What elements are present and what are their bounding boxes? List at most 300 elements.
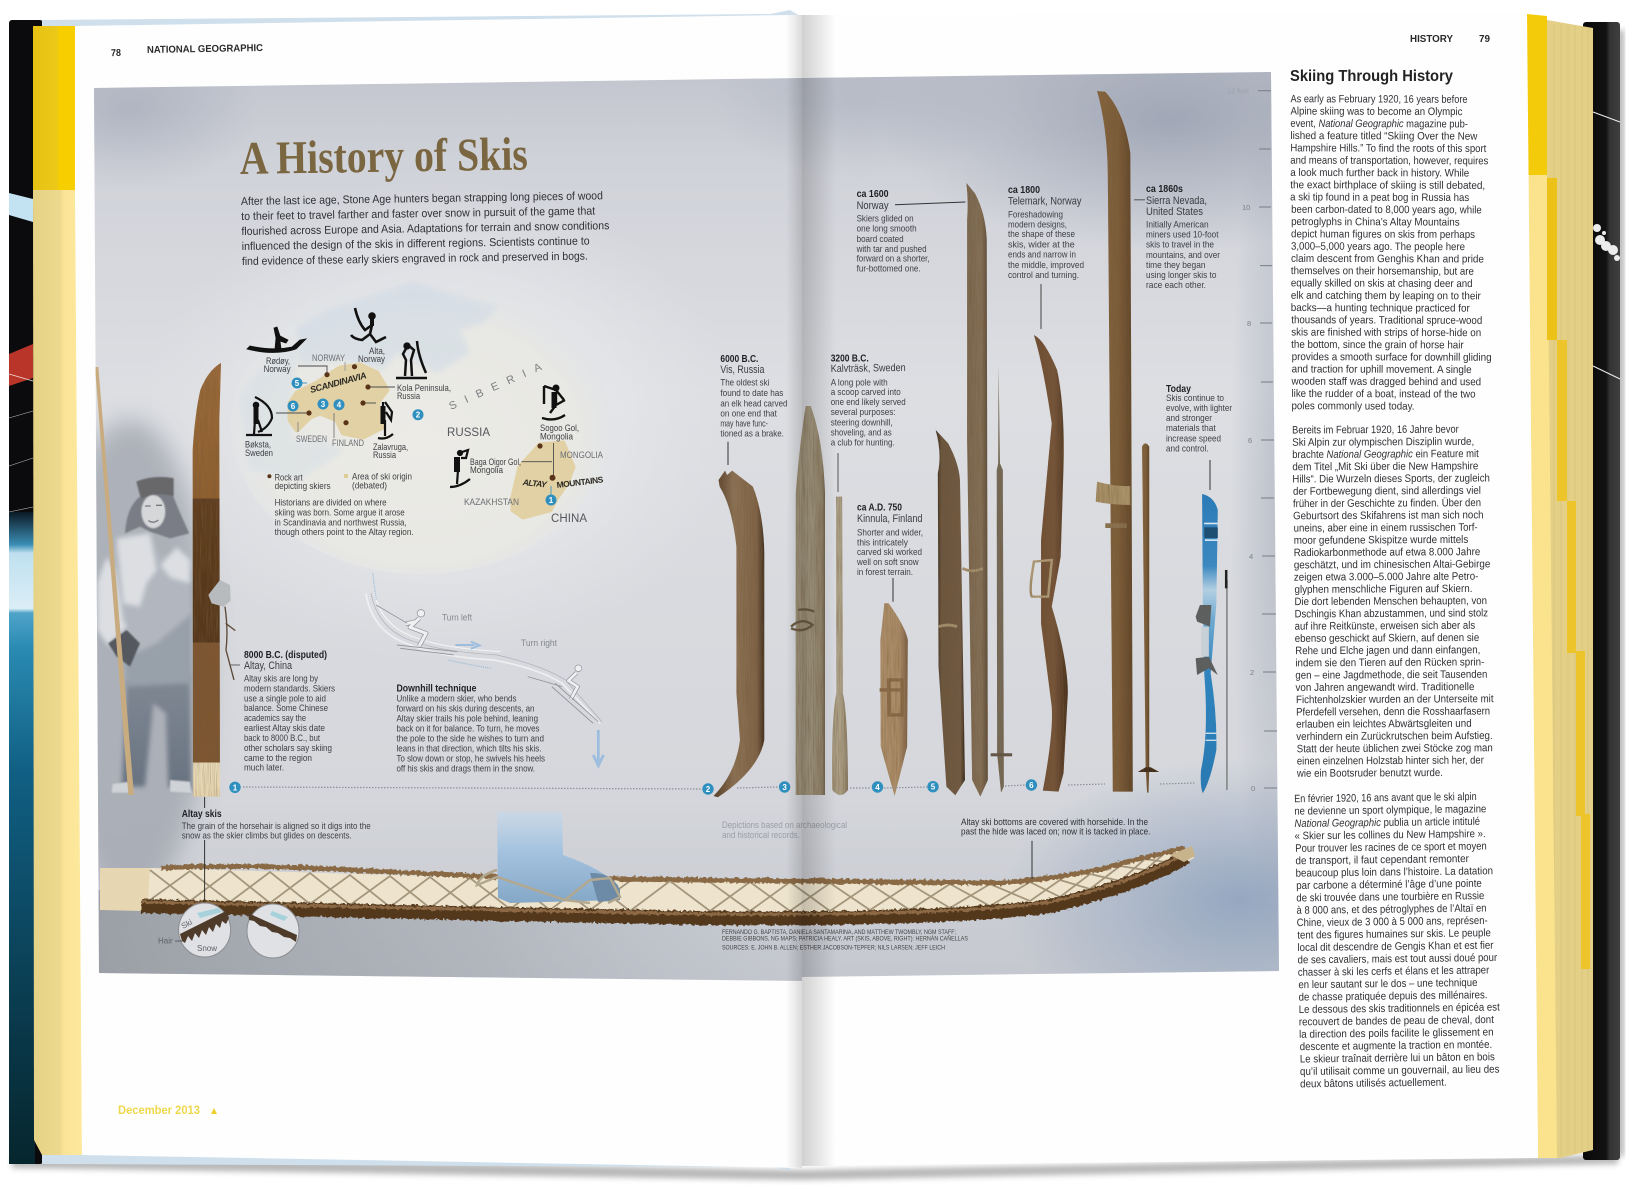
text block: ca 1800: modern designs, xyxy=(1008,218,1067,229)
sidebar text: German: der Fortbewegung dient, sind allerdings viel xyxy=(1293,485,1481,498)
text block: ca 1600: Norway xyxy=(857,200,889,212)
note: depictions: and historical records. xyxy=(722,830,800,840)
sidebar text: English: skis are finished with strips of horse-hide on xyxy=(1291,327,1481,339)
text block: 6000 B.C. xyxy=(720,354,787,465)
sidebar text: French: beaucoup plus loin dans l’histoire. La datation xyxy=(1295,865,1493,880)
sidebar text: German: Hills“. Die Wurzeln dieses Sports, der zugleich xyxy=(1292,472,1490,486)
map labels: SCANDINAVIA xyxy=(309,370,368,395)
text block: 8000 B.C.: Altay, China xyxy=(244,660,292,672)
text block: 3200 B.C.: shoveling, and as xyxy=(831,426,892,438)
ski 3200 B.C. xyxy=(796,406,825,795)
page header right xyxy=(1410,34,1490,45)
hood fur xyxy=(125,477,189,538)
text block: ca 1800: the shape of these xyxy=(1008,228,1075,239)
lattice lacing xyxy=(150,853,1165,911)
callout: Altay skis xyxy=(182,797,371,900)
ski ca A.D. 750 xyxy=(880,603,908,796)
map labels: Kola Peninsula, xyxy=(397,383,451,393)
sidebar text: German: indem sie den Tieren auf den Rücken sprin- xyxy=(1295,656,1485,669)
text block: downhill technique: the pole to the side he wishes to turn and xyxy=(396,732,544,743)
right page edge stack xyxy=(1527,14,1593,1158)
text block: 8000 B.C.: 8000 B.C. (disputed) xyxy=(244,650,327,661)
ski ca 1600 xyxy=(966,183,988,797)
left page xyxy=(75,15,802,1168)
map legend: depicting skiers xyxy=(275,481,331,491)
diagram labels: turns xyxy=(442,612,557,648)
panel: illustration background xyxy=(94,72,1279,981)
globe disc xyxy=(231,278,611,574)
heading: sidebar: Skiing Through History xyxy=(1290,68,1453,85)
ski ca 1860s xyxy=(1097,91,1133,792)
right page xyxy=(802,14,1538,1166)
map labels: Mongolia xyxy=(540,432,573,442)
pole basket xyxy=(991,753,1012,756)
text block: ca 1600 xyxy=(856,189,965,274)
sidebar text: French: Chine, vieux de 3 000 à 5 000 ans, représen- xyxy=(1297,915,1488,929)
sidebar text: German: erlauben ein leichtes Abwärtsgleiten und xyxy=(1296,718,1472,731)
text block: 6000 B.C.: The oldest ski xyxy=(720,377,769,388)
map note: Historians are divided on where xyxy=(275,498,387,508)
numbered ski markers xyxy=(229,779,1037,795)
map labels: Sogoo Gol, xyxy=(540,423,579,433)
text block: 8000 B.C.: other scholars say skiing xyxy=(244,742,332,753)
text block: ca 1860s: ca 1860s xyxy=(1146,184,1183,195)
height scale in feet: 8 xyxy=(1247,319,1251,328)
map labels: Baga Oigor Gol, xyxy=(470,457,521,467)
sidebar text: French: deux bâtons utilisés actuellement. xyxy=(1300,1077,1447,1090)
map labels: Sweden xyxy=(245,448,273,458)
text block: ca 1800: Telemark, Norway xyxy=(1008,196,1082,208)
sidebar text: French: Le dessous des skis traditionnels en épicéa est xyxy=(1299,1002,1500,1016)
map labels: SWEDEN xyxy=(296,434,327,444)
skier turning left xyxy=(376,605,457,655)
sidebar text: German: früher in der Geschichte zu finden. Über den xyxy=(1293,497,1481,510)
map labels: SIBERIA xyxy=(447,361,544,413)
numbered map markers: 5 xyxy=(295,379,300,388)
credits: FERNANDO G. BAPTISTA, DANIELA SANTAMARINA, AND MATTHEW TWOMBLY, NGM STAFF; xyxy=(722,930,956,936)
text block: ca 1860s xyxy=(1134,184,1220,290)
sidebar text: German: von Jahren angewandt wird. Traditionelle xyxy=(1295,681,1474,694)
text block: 8000 B.C.: academics say the xyxy=(244,712,306,723)
illustration: Altay skier xyxy=(95,363,235,797)
text block: ca 1600: board coated xyxy=(857,233,904,244)
diagram labels: turns: Turn left xyxy=(442,612,472,622)
sidebar text: English: 3,000–5,000 years ago. The people here xyxy=(1291,241,1465,253)
sidebar text: English: equally skilled on skis at chasing deer and xyxy=(1291,277,1473,290)
numbered ski markers: 3 xyxy=(782,783,787,792)
sidebar text: English: elk and catching them by leaping on to their xyxy=(1291,290,1481,302)
modern pole xyxy=(1226,580,1228,790)
coat fur patches xyxy=(97,533,190,645)
intro text: influenced the design of the skis in different regions. Scientists continue to xyxy=(242,236,590,253)
pole basket xyxy=(1138,767,1159,772)
text block: downhill technique: Altay skier trails his pole behind, leaning xyxy=(396,712,538,723)
small strap xyxy=(1105,523,1127,528)
hairy ski xyxy=(936,430,965,795)
text block: ca 1600: ca 1600 xyxy=(857,189,889,200)
text block: ca A.D. 750: ca A.D. 750 xyxy=(857,502,902,514)
height scale in feet: 0 xyxy=(1251,784,1255,793)
text block: 3200 B.C.: A long pole with xyxy=(831,376,888,388)
sidebar text: French: en leur sautant sur le dos – une technique xyxy=(1298,977,1477,991)
cover board bottom edge xyxy=(42,1150,790,1170)
sidebar text: German: Geburtsort des Skifahrens ist man sich noch xyxy=(1293,509,1484,522)
sidebar text: German: glyphen menschliche Figuren auf Skiern. xyxy=(1294,583,1472,596)
text block: 3200 B.C.: several purposes: xyxy=(831,406,896,417)
map legend xyxy=(267,472,412,491)
intro text: to their feet to travel farther and faster over snow in pursuit of the game that xyxy=(241,205,596,223)
scoop pole xyxy=(832,497,848,795)
text block: 8000 B.C.: back to 8000 B.C., but xyxy=(244,732,320,743)
text block: today: evolve, with lighter xyxy=(1166,402,1232,413)
man's lower coat xyxy=(124,586,192,688)
map note: though others point to the Altay region. xyxy=(275,527,414,537)
sidebar text: English: the bottom, since the grain of horse hair xyxy=(1291,339,1464,351)
sidebar text: German: Dschingis Khan abzustammen, und sind stolz xyxy=(1295,607,1488,620)
map leader lines xyxy=(276,362,554,496)
sidebar text: German: brachte National Geographic ein Feature mit xyxy=(1292,448,1479,461)
text block: 6000 B.C.: tioned as a brake. xyxy=(720,428,784,439)
text block: ca 1860s: race each other. xyxy=(1146,279,1206,290)
origin area: Altay xyxy=(513,443,573,517)
sidebar text: English: backs—a hunting technique practiced for xyxy=(1291,302,1470,315)
magnifier: hair grips snow xyxy=(158,903,231,957)
map note: in Scandinavia and northwest Russia, xyxy=(275,518,407,528)
ski loop strap xyxy=(1031,560,1052,597)
numbered map markers: 4 xyxy=(337,401,342,410)
skier turning right xyxy=(528,665,598,723)
sidebar text: German: wie ein Bootsruder benutzt wurde. xyxy=(1296,767,1443,780)
magnifier: hair glides on snow xyxy=(247,904,299,958)
text block: ca 1860s: Initially American xyxy=(1146,219,1209,230)
text block: 3200 B.C.: steering downhill, xyxy=(831,416,893,428)
icon: petroglyph Alta xyxy=(351,308,386,342)
sidebar text: English: depict human figures on skis from perhaps xyxy=(1291,228,1476,241)
text block: ca 1860s: time they began xyxy=(1146,259,1206,270)
text block: ca 1600: Skiers glided on xyxy=(857,212,914,224)
thin pole xyxy=(997,367,1004,793)
sidebar text: French: recouvert de bandes de peau de cheval, dont xyxy=(1299,1014,1494,1028)
sidebar text: English: provides a smooth surface for downhill gliding xyxy=(1292,351,1492,364)
sidebar text: German: einen einzelnen Holzstab hinter sich her, der xyxy=(1297,755,1484,767)
sidebar text: French: local dit descendre de Gengis Khan et est fier xyxy=(1297,940,1494,954)
intro text: After the last ice age, Stone Age hunters began strapping long pieces of wood xyxy=(241,190,603,208)
1860s pole xyxy=(1142,443,1149,793)
sidebar text: French: chasser à ski les cerfs et élans et les attraper xyxy=(1298,964,1490,979)
text block: downhill technique: Downhill technique xyxy=(396,684,477,694)
text block: ca A.D. 750 xyxy=(856,502,923,602)
left page edge stack xyxy=(33,26,82,1155)
sidebar text: French: descente et augmente la traction en montée. xyxy=(1300,1039,1492,1053)
numbered ski markers: 1 xyxy=(233,783,238,792)
arrow: turn left direction xyxy=(455,642,480,649)
sidebar text: French: de transport, il faut cependant remonter xyxy=(1295,853,1469,867)
callout: ski bottoms: past the hide was laced on; now it is tacked in place. xyxy=(961,826,1150,836)
illustration: downhill turn diagram xyxy=(366,573,603,766)
map note xyxy=(275,498,414,537)
text block: ca 1800: ca 1800 xyxy=(1008,185,1040,196)
sidebar text: French: « Skier sur les collines du New Hampshire ». xyxy=(1295,828,1486,842)
sidebar text: German: Pferdefell versehen, denn die Rosshaarfasern xyxy=(1296,705,1490,718)
text block: ca 1800: ends and narrow in xyxy=(1008,248,1076,260)
sidebar text: French: de ses cavaliers, mais est tout aussi doué pour xyxy=(1298,952,1498,966)
sidebar text: German: auf ihre Reitkünste, erweisen sich aber als xyxy=(1295,620,1476,633)
text block: 8000 B.C.: use a single pole to aid xyxy=(244,692,326,703)
map legend: Area of ski origin xyxy=(352,472,412,482)
text block: ca 1800: the middle, improved xyxy=(1008,259,1084,270)
text block: ca 1860s: skis to travel in the xyxy=(1146,238,1214,250)
text block: 8000 B.C.: earliest Altay skis date xyxy=(244,722,325,733)
sidebar text: English: the exact birthplace of skiing is still debated, xyxy=(1290,179,1485,192)
ski lashing xyxy=(791,609,814,630)
sidebar text: German: Bereits im Februar 1920, 16 Jahre bevor xyxy=(1292,424,1459,437)
height scale in feet: 4 xyxy=(1249,552,1253,561)
face xyxy=(141,495,165,528)
sidebar text: English: Hampshire Hills.” To find the roots of this sport xyxy=(1290,142,1486,155)
map legend: Rock art xyxy=(275,472,303,482)
magnifier: hair grips snow: Hair xyxy=(158,936,173,946)
magnifier: hair grips snow: Ski xyxy=(180,917,194,931)
intro text: flourished across Europe and Asia. Adaptations for terrain and snow conditions xyxy=(241,220,610,238)
man's coat xyxy=(121,578,192,653)
map labels: Bøksta, xyxy=(245,440,271,450)
sidebar text: German: Statt der heute üblichen zwei Stöcke zog man xyxy=(1297,742,1493,755)
map labels: RUSSIA xyxy=(447,427,490,439)
height scale in feet: 10 xyxy=(1242,203,1250,212)
numbered map markers: 3 xyxy=(321,400,326,409)
text block: 3200 B.C.: Kalvträsk, Sweden xyxy=(831,362,906,375)
text block: ca A.D. 750: in forest terrain. xyxy=(857,566,913,577)
sidebar text: English: a ski tip found in a peat bog in Russia has xyxy=(1290,191,1470,204)
text block: ca 1800: skis, wider at the xyxy=(1008,238,1075,250)
rock art sites xyxy=(306,364,556,481)
callout: Altay skis: Altay skis xyxy=(182,809,222,820)
right glove xyxy=(208,580,231,607)
text block: today: Today xyxy=(1166,384,1191,395)
sidebar text: English: As early as February 1920, 16 years before xyxy=(1291,93,1468,106)
text block: 3200 B.C.: 3200 B.C. xyxy=(831,354,869,364)
numbered map markers: 2 xyxy=(416,411,421,420)
text block: ca 1600: fur-bottomed one. xyxy=(857,263,921,274)
text block: 8000 B.C.: much later. xyxy=(244,762,284,773)
text block: today: Skis continue to xyxy=(1166,392,1224,403)
ski toe strap xyxy=(1096,482,1130,505)
ski strap 1600 xyxy=(962,568,983,571)
text block: today: materials that xyxy=(1166,422,1216,433)
text block: 3200 B.C.: a scoop carved into xyxy=(831,386,901,397)
intro text: find evidence of these early skiers engraved in rock and preserved in bogs. xyxy=(242,251,588,268)
numbered ski markers: 5 xyxy=(931,783,936,792)
text block: ca A.D. 750: well on soft snow xyxy=(856,556,919,567)
text block: today xyxy=(1166,384,1232,490)
panel: book cover left edge xyxy=(9,20,43,1164)
sidebar text: English: claim descent from Genghis Khan and pride xyxy=(1291,253,1484,265)
text block: ca 1860s: miners used 10-foot xyxy=(1146,229,1219,240)
sidebar text: French: la direction des poils facilite le glissement en xyxy=(1299,1026,1494,1041)
sidebar text: English: themselves on their horsemanship, but are xyxy=(1291,265,1474,278)
sidebar text: French: tent des figures humaines sur skis. Le peuple xyxy=(1297,927,1491,942)
icon: petroglyph Boksta xyxy=(246,397,272,435)
sidebar text: English: thousands of years. Traditional spruce-wood xyxy=(1291,314,1482,327)
sidebar text: French: Pour trouver les racines de ce sport et moyen xyxy=(1295,840,1487,855)
text block: 6000 B.C.: an elk head carved xyxy=(720,397,787,408)
callout: Altay skis: The grain of the horsehair is aligned so it digs into the xyxy=(182,820,371,831)
text block: 6000 B.C.: 6000 B.C. xyxy=(720,354,759,365)
ski base xyxy=(100,848,1194,923)
map labels: NORWAY xyxy=(312,353,345,363)
text block: ca 1860s: Sierra Nevada, xyxy=(1146,195,1207,207)
callout: ski bottoms: Altay ski bottoms are covered with horsehide. In the xyxy=(961,816,1148,827)
page header left: NATIONAL GEOGRAPHIC xyxy=(147,43,263,56)
map labels: Zalavruga, xyxy=(373,442,408,452)
sidebar text: German: moor gefundene Skispitze wurde mittels xyxy=(1294,534,1469,547)
man's legs xyxy=(122,673,192,792)
sidebar text: French: qu’il utilisait comme un gouvernail, au lieu des xyxy=(1300,1064,1500,1078)
sidebar text: German: Radiokarbonmethode auf etwa 8.000 Jahre xyxy=(1294,546,1480,559)
map labels: Norway xyxy=(358,354,386,364)
panel: book cover right edge xyxy=(1583,22,1620,1160)
text block: 8000 B.C.: balance. Some Chinese xyxy=(244,702,328,713)
arrow: downward direction xyxy=(593,730,603,766)
sidebar text: French: Le skieur traînait derrière lui un bâton en bois xyxy=(1300,1051,1495,1066)
ocean at the top of the globe xyxy=(297,282,497,373)
page header left: 78 xyxy=(111,48,121,59)
text block: 8000 B.C.: modern standards. Skiers xyxy=(244,682,335,693)
map labels: FINLAND xyxy=(332,438,364,448)
height scale in feet xyxy=(1227,86,1277,793)
text block: downhill technique: To slow down or stop, he swivels his heels xyxy=(396,752,545,763)
text block: ca 1860s: using longer skis to xyxy=(1146,269,1216,280)
sidebar text: English: poles commonly used today. xyxy=(1291,400,1414,413)
illustration: long Altay ski xyxy=(100,846,1195,923)
sea at the left of the globe xyxy=(240,345,345,480)
diagram labels: turns: Turn right xyxy=(521,638,557,648)
cover board top edge xyxy=(42,10,800,28)
hat xyxy=(137,477,173,498)
sidebar text: English: been carbon-dated to 8,000 years ago, while xyxy=(1291,204,1482,216)
modern blue ski xyxy=(1201,494,1218,793)
sidebar text: French: de chasse pratiquée depuis des millénaires. xyxy=(1299,989,1488,1004)
text block: ca 1600: one long smooth xyxy=(857,222,917,234)
credits xyxy=(722,930,968,952)
gutter shading xyxy=(786,15,836,1168)
ski binding modern xyxy=(1196,605,1218,675)
sidebar text: German xyxy=(1292,423,1494,780)
sidebar text: French: ne devienne un sport olympique, le magazine xyxy=(1294,803,1486,818)
ski tip graphics xyxy=(1204,523,1218,741)
sidebar text: French: National Geographic publia un article intitulé xyxy=(1294,816,1480,830)
left glove xyxy=(108,630,140,667)
note: depictions xyxy=(722,820,847,840)
text block: today: increase speed xyxy=(1166,432,1221,443)
credits: DEBBIE GIBBONS, NG MAPS; PATRICIA HEALY. ART (SKIS, ABOVE, RIGHT): HERNÁN CAÑELLAS xyxy=(722,936,968,942)
sidebar text: English: lished a feature titled “Skiing Over the New xyxy=(1290,130,1478,143)
origin area: Scandinavia xyxy=(290,365,387,437)
sidebar text: German: dem Titel „Mit Ski über die New Hampshire xyxy=(1292,460,1478,473)
height scale in feet: 6 xyxy=(1248,436,1252,445)
text block: 6000 B.C.: on one end that xyxy=(720,407,777,418)
text block: downhill technique: back on it for balance. To turn, he moves xyxy=(396,722,540,733)
ski strap xyxy=(939,625,957,627)
text block: ca A.D. 750: Kinnula, Finland xyxy=(857,513,923,525)
horsehair top edge xyxy=(160,848,1185,883)
illustration: boot tied to ski xyxy=(477,812,620,903)
text block: 6000 B.C.: found to date has xyxy=(720,387,784,398)
dotted blue trail xyxy=(373,573,492,668)
sidebar text: German: ebenso geschickt auf Skiern, auf denen sie xyxy=(1295,632,1479,645)
page header left xyxy=(111,43,263,59)
text block: 3200 B.C.: a club for hunting. xyxy=(831,437,895,448)
text block: ca A.D. 750: Shorter and wider, xyxy=(857,526,923,537)
ski lace xyxy=(225,607,235,680)
map labels: Rødøy, xyxy=(266,356,290,366)
text block: downhill technique: off his skis and drags them in the snow. xyxy=(396,762,535,773)
sidebar text: English: petroglyphs in China’s Altay Mountains xyxy=(1291,216,1460,229)
text block: ca 1800: Foreshadowing xyxy=(1008,208,1063,219)
text block: today: and control. xyxy=(1166,442,1209,453)
page header right: HISTORY xyxy=(1410,34,1453,45)
sidebar text: French: par carbone a déterminé l’âge d’une pointe xyxy=(1296,878,1482,892)
chart: globe map of ski origins xyxy=(231,278,611,574)
text block: ca 1860s: mountains, and over xyxy=(1146,249,1220,260)
text block: ca 1800 xyxy=(1008,185,1084,329)
sidebar text: German: Die dort lebenden Menschen behaupten, von xyxy=(1294,595,1487,608)
credits: SOURCES: E. JOHN B. ALLEN; ESTHER JACOBSON-TEPFER; NILS LARSEN; JEFF LEICH xyxy=(722,946,945,952)
text block: ca 1860s: United States xyxy=(1146,206,1203,218)
text block: 8000 B.C.: Altay skis are long by xyxy=(244,672,318,683)
numbered ski markers: 4 xyxy=(875,783,880,792)
footer: December 2013 xyxy=(118,1105,200,1117)
icon: petroglyph Rodoy xyxy=(247,327,306,352)
text block: 6000 B.C.: may have func- xyxy=(720,417,768,428)
icon: petroglyph Zalavruga xyxy=(378,402,393,438)
text block: ca 1800: control and turning. xyxy=(1008,269,1079,280)
map labels: Alta, xyxy=(369,346,385,356)
facial features xyxy=(145,505,162,522)
map labels: MOUNTAINS xyxy=(556,474,604,490)
sidebar text: German: verhindern ein Zurückrutschen beim Aufstieg. xyxy=(1296,730,1493,743)
map labels: Russia xyxy=(397,391,420,401)
map labels: Norway xyxy=(264,364,291,374)
numbered ski markers: 2 xyxy=(706,785,711,794)
sidebar text: German: uneins, aber eine in einem russischen Torf- xyxy=(1294,522,1478,535)
sidebar text: German: gen – eine Jagdmethode, die seit Tausenden xyxy=(1295,669,1487,682)
map legend: (debated) xyxy=(352,480,387,490)
sidebar text: English: Alpine skiing was to become an Olympic xyxy=(1290,106,1463,118)
sidebar text: French: En février 1920, 16 ans avant que le ski alpin xyxy=(1294,791,1477,805)
sidebar text: English: a look much further back in history. While xyxy=(1290,167,1469,180)
text block: downhill technique: Unlike a modern skier, who bends xyxy=(396,692,517,703)
sidebar text: German: Fichtenholzskier wurden an der Unterseite mit xyxy=(1296,693,1494,706)
height scale in feet: 2 xyxy=(1250,668,1254,677)
sidebar text: French: à 8 000 ans, et des pétroglyphes de l’Altaï en xyxy=(1296,902,1487,917)
text block: 6000 B.C.: Vis, Russia xyxy=(720,364,764,376)
text block: 8000 B.C. xyxy=(230,650,335,773)
text block: today: and stronger xyxy=(1166,412,1212,423)
numbered map markers xyxy=(288,378,556,506)
sidebar text: German: Ski Alpin zur olympischen Disziplin wurde, xyxy=(1292,436,1474,449)
magnifier: hair grips snow: Snow xyxy=(197,944,217,953)
numbered map markers: 6 xyxy=(291,402,296,411)
ski tip tuft xyxy=(1170,846,1195,862)
text block: ca 1600: with tar and pushed xyxy=(856,243,927,254)
text block: ca A.D. 750: carved ski worked xyxy=(857,546,922,557)
sidebar text: German: geschätzt, und im chinesischen Altai-Gebirge xyxy=(1294,558,1490,571)
map labels: Russia xyxy=(373,450,396,460)
text block: ca 1600: forward on a shorter, xyxy=(857,252,930,263)
map labels xyxy=(245,346,604,525)
ski ca 1800 xyxy=(1034,335,1068,792)
